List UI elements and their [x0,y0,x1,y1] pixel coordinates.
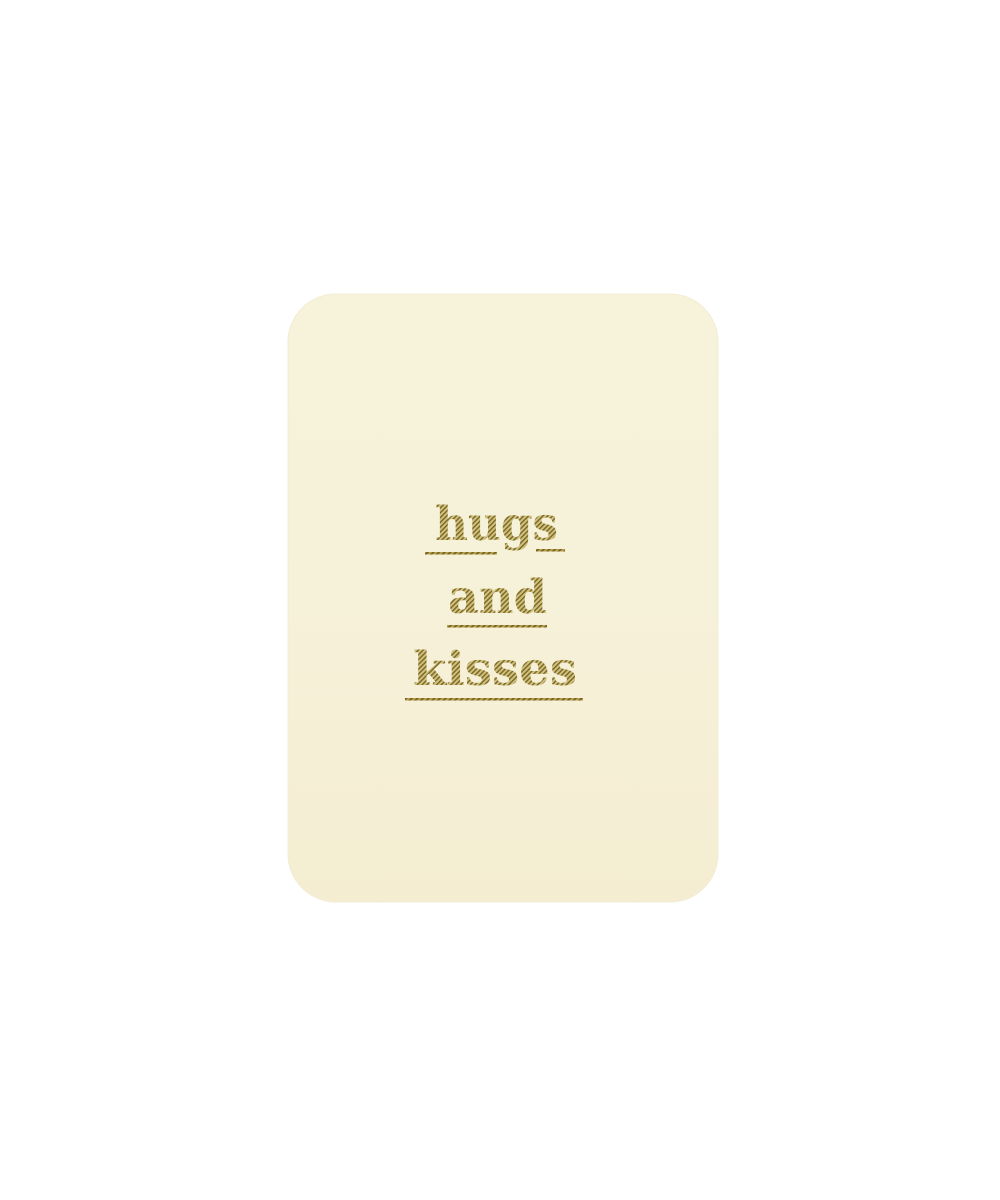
foil text: hugs: hugs [435,497,558,552]
foil text: and: and [448,570,547,625]
underline: hugs [425,549,565,554]
underline: kisses [405,698,583,700]
underline: and [447,625,547,628]
card [288,294,718,902]
foil text: kisses: kisses [413,642,577,697]
